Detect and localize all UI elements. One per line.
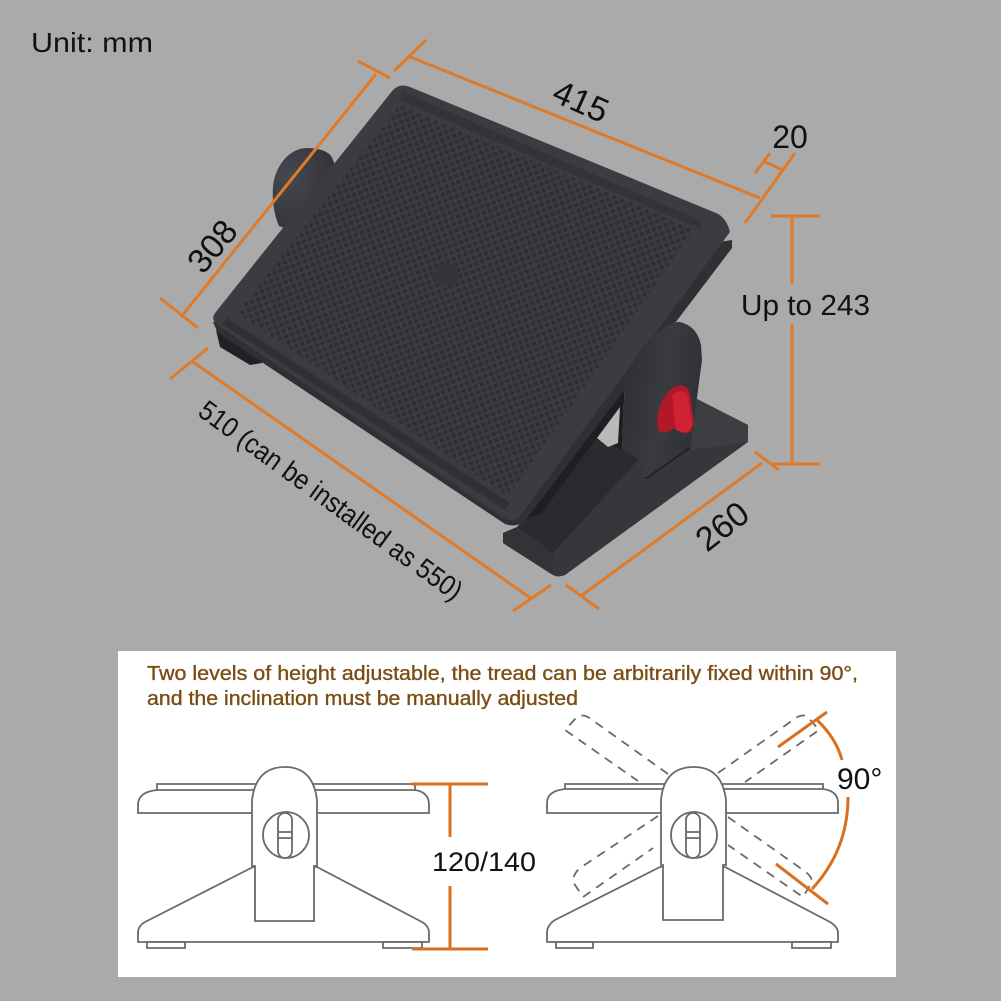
red adjustment knob <box>657 385 694 433</box>
feet <box>147 942 422 948</box>
panel caption: Two levels of height adjustable, the tread can be arbitrarily fixed within 90°, <box>147 663 858 685</box>
tilt label: 90° <box>837 763 882 796</box>
feet <box>556 942 831 948</box>
base front facet <box>503 527 553 575</box>
unit label: Unit: mm <box>31 27 153 58</box>
gap under the tread <box>597 407 620 447</box>
panel caption: and the inclination must be manually adjusted <box>147 688 578 710</box>
tread side edge <box>213 240 732 525</box>
panel caption <box>147 663 858 710</box>
post lower seam <box>645 448 690 479</box>
dimension label 510: 510 (can be installed as 550) <box>193 394 468 606</box>
tread plate <box>547 784 838 813</box>
tread top face <box>213 86 730 520</box>
height dimension <box>412 784 488 949</box>
lower ridged strip <box>222 318 510 510</box>
tilt diagram <box>547 716 838 948</box>
orange dimension lines <box>160 40 820 611</box>
510 dimension line <box>170 348 551 611</box>
260 dimension line <box>566 452 779 609</box>
base outline <box>138 867 429 942</box>
pivot post <box>252 767 317 921</box>
adjustment dial <box>671 812 717 858</box>
left pivot knob <box>273 148 340 232</box>
centre cap <box>434 263 458 287</box>
adjustment dial <box>263 812 309 858</box>
dimension label 308: 308 <box>180 213 246 281</box>
dimension label 260: 260 <box>689 494 757 559</box>
dimension label up to 243: Up to 243 <box>741 290 870 322</box>
base inner slope in shadow <box>517 438 640 553</box>
308 dimension line <box>160 61 390 328</box>
dimension label 415: 415 <box>547 73 614 131</box>
tread plate <box>138 784 429 813</box>
dimension label 20: 20 <box>772 119 808 155</box>
shadow under the tread <box>523 377 625 518</box>
tilt angle arc <box>776 712 848 904</box>
415 dimension line <box>394 40 760 198</box>
height dimension line <box>771 216 820 464</box>
pivot post <box>661 767 726 920</box>
base outline <box>547 867 838 942</box>
tread dotted texture <box>237 105 694 497</box>
upper ridged strip <box>399 92 702 229</box>
dashed tilt positions <box>565 716 819 897</box>
rear foot <box>216 330 262 365</box>
height diagram <box>138 767 429 948</box>
white panel: adjustment diagrams <box>118 651 896 977</box>
base rear wedge <box>690 398 748 450</box>
height label: 120/140 <box>432 847 536 877</box>
20 dimension line <box>745 153 795 223</box>
right pivot post <box>622 322 702 478</box>
footrest product photo <box>213 86 748 576</box>
base lower face <box>503 398 748 576</box>
